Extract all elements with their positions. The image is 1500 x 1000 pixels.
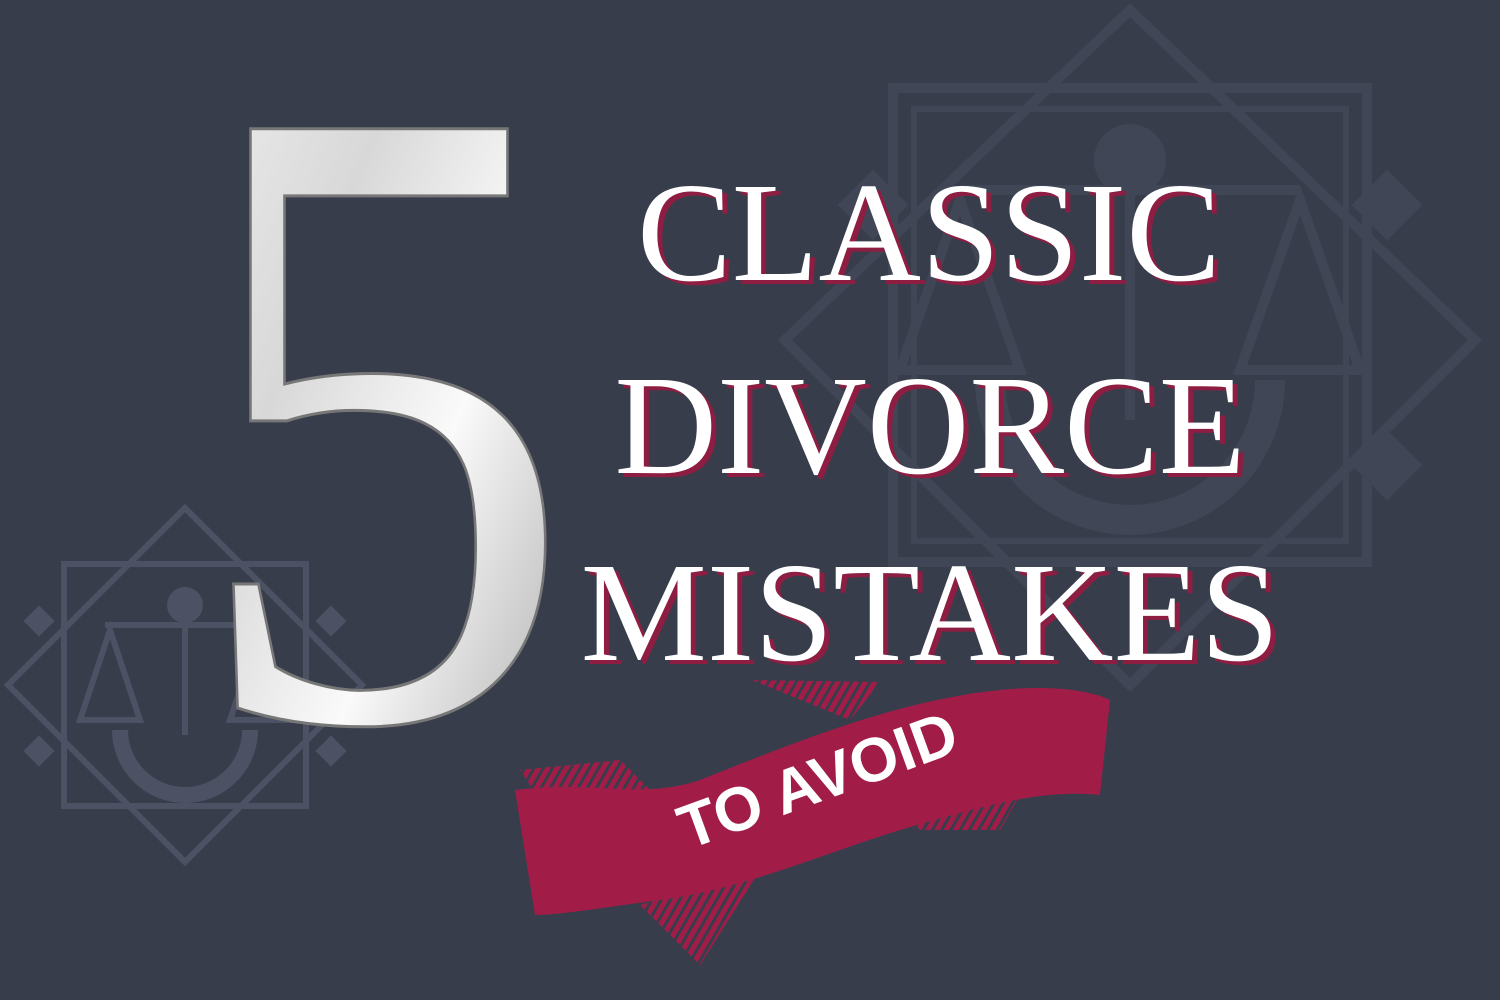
- ribbon text: TO AVOID: [669, 698, 967, 863]
- title: [581, 153, 1284, 695]
- ribbon: [515, 680, 1110, 965]
- emblem: small scales: [8, 508, 362, 862]
- title: DIVORCE: [614, 346, 1246, 504]
- title: CLASSIC: [637, 153, 1221, 311]
- title: MISTAKES: [581, 533, 1279, 691]
- emblem: large background scales: [785, 10, 1475, 685]
- title: CLASSIC: [642, 157, 1226, 315]
- title: DIVORCE: [619, 350, 1251, 508]
- title: MISTAKES: [586, 537, 1284, 695]
